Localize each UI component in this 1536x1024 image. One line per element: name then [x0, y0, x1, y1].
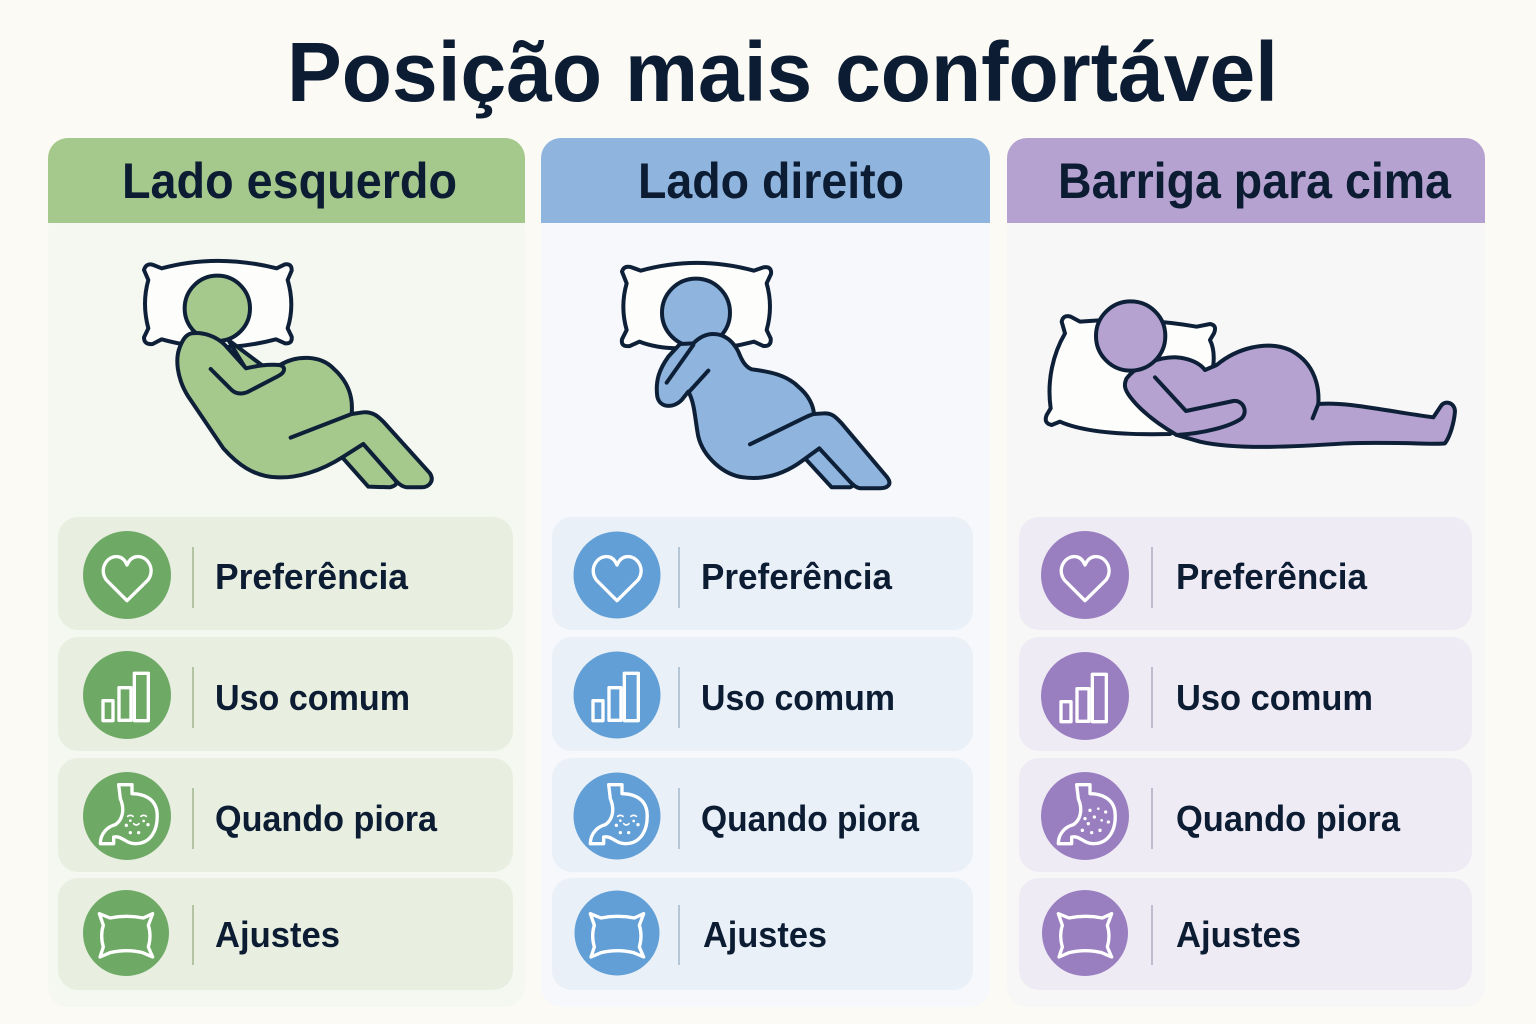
row: preferência: Preferência: [1176, 556, 1368, 597]
row: quando piora: [1019, 758, 1472, 872]
row: ajustes: [1019, 878, 1472, 990]
header: lado esquerdo: [48, 138, 525, 223]
row: quando piora: Quando piora: [215, 798, 438, 839]
row: uso comum: Uso comum: [1176, 677, 1373, 718]
title: Posição mais confortável: [287, 25, 1278, 119]
row: preferência: [552, 517, 973, 630]
row: quando piora: [552, 758, 973, 872]
panel: lado direito: [541, 138, 990, 1007]
row: quando piora: Quando piora: [1176, 798, 1401, 839]
row: uso comum: [552, 637, 973, 751]
row: ajustes: Ajustes: [1176, 914, 1301, 955]
row: uso comum: [58, 637, 513, 751]
row: quando piora: Quando piora: [701, 798, 920, 839]
figure: pregnant person on left side: [144, 261, 432, 487]
figure: pregnant person on right side: [622, 263, 889, 488]
row: ajustes: Ajustes: [703, 914, 827, 955]
row: preferência: [58, 517, 513, 630]
row: preferência: [1019, 517, 1472, 630]
row: uso comum: Uso comum: [701, 677, 895, 718]
row: ajustes: [552, 878, 973, 990]
row: preferência: Preferência: [215, 556, 409, 597]
row: quando piora: [58, 758, 513, 872]
header: lado direito: [541, 138, 990, 223]
row: preferência: Preferência: [701, 556, 893, 597]
row: ajustes: Ajustes: [215, 914, 340, 955]
panel: lado esquerdo: [48, 138, 525, 1007]
row: uso comum: [1019, 637, 1472, 751]
figure: pregnant person on back: [1046, 301, 1455, 447]
header: barriga para cima: [1007, 138, 1485, 223]
row: uso comum: Uso comum: [215, 677, 410, 718]
header: lado direito: Lado direito: [638, 153, 904, 209]
header: barriga para cima: Barriga para cima: [1058, 153, 1452, 209]
header: lado esquerdo: Lado esquerdo: [122, 153, 457, 209]
row: ajustes: [58, 878, 513, 990]
panel: barriga para cima: [1007, 138, 1485, 1007]
